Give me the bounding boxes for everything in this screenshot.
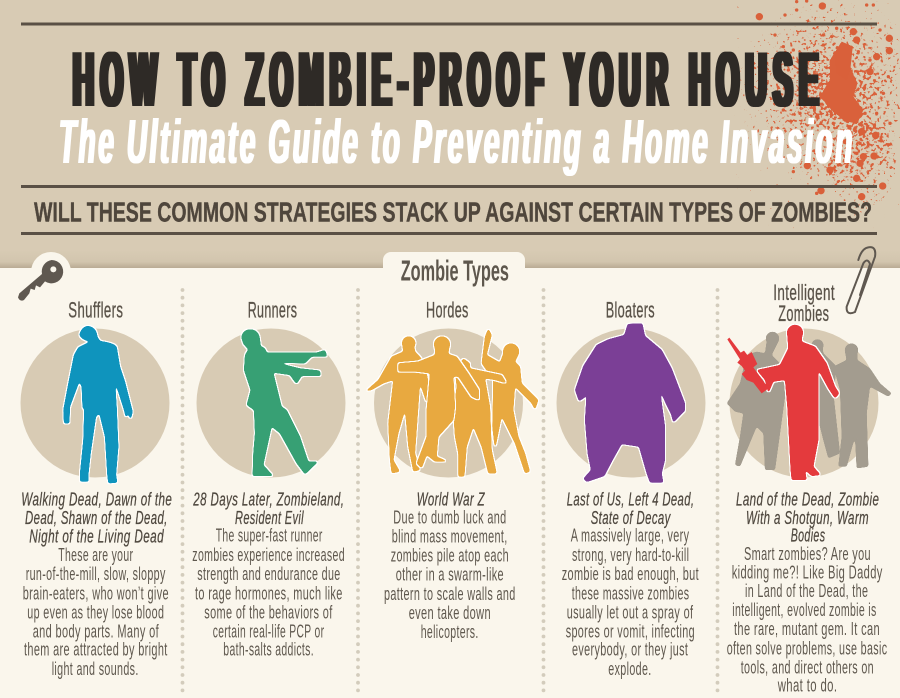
- heading: shufflers: Shufflers: [68, 297, 123, 322]
- text: hordes description: helicopters.: [421, 622, 479, 642]
- text: hordes description: zombies pile atop each: [391, 546, 509, 566]
- text: runners description: zombies experience increased: [192, 545, 345, 565]
- text: shufflers description: run-of-the-mill, slow, sloppy: [26, 564, 166, 584]
- text: shufflers description: Dead, Shawn of the Dead,: [25, 508, 168, 528]
- tab: zombie types: [383, 252, 525, 268]
- icon: key: [18, 260, 63, 301]
- text: bloaters description: these massive zombies: [572, 583, 689, 603]
- text: runners description: strength and endurance due: [197, 564, 341, 584]
- column dividers: [182, 290, 718, 698]
- text: runners description: bath-salts addicts.: [223, 640, 314, 660]
- text: intelligent description: [727, 490, 887, 696]
- text: bloaters description: strong, very hard-to-kill: [572, 545, 689, 565]
- text: runners description: Resident Evil: [235, 508, 304, 528]
- heading: hordes: Hordes: [426, 297, 469, 322]
- panel: hordes: [365, 297, 538, 642]
- text: hordes description: Due to dumb luck and: [393, 507, 507, 527]
- figure: horde of zombies: [365, 328, 538, 477]
- text: bloaters description: zombie is bad enough, but: [562, 564, 699, 584]
- text: shufflers description: light and sounds.: [52, 659, 139, 679]
- heading: intelligent zombies: Zombies: [778, 301, 829, 326]
- text: shufflers description: [21, 490, 172, 679]
- figure: runner zombie: [241, 329, 327, 476]
- header rule middle: [21, 185, 877, 188]
- panel: shufflers: [20, 297, 172, 679]
- text: intelligent description: Bodies: [791, 526, 825, 546]
- panel: runners: [192, 297, 346, 660]
- text: bloaters description: [562, 490, 699, 679]
- heading: intelligent zombies: [773, 280, 835, 326]
- text: runners description: some of the behaviors of: [204, 602, 333, 622]
- circle: shufflers backdrop: [20, 328, 170, 478]
- text: bloaters description: usually let out a spray of: [567, 602, 694, 622]
- text: runners description: The super-fast runner: [216, 526, 323, 546]
- text: bloaters description: everybody, or they just: [572, 640, 688, 660]
- icon: paper clip: [847, 247, 875, 313]
- circle: intelligent backdrop: [730, 328, 878, 478]
- heading: intelligent zombies: Intelligent: [773, 280, 835, 305]
- text: bloaters description: A massively large, very: [571, 526, 689, 546]
- heading: runners: Runners: [248, 297, 297, 322]
- text: bloaters description: spores or vomit, infecting: [566, 621, 695, 641]
- text: hordes description: pattern to scale walls and: [384, 584, 516, 604]
- text: runners description: 28 Days Later, Zombieland,: [193, 490, 344, 510]
- blood splatter: [730, 0, 900, 215]
- text: hordes description: blind mass movement,: [392, 526, 508, 546]
- text: runners description: certain real-life PCP or: [213, 621, 324, 641]
- text: hordes description: even take down: [409, 603, 491, 623]
- text: bloaters description: Last of Us, Left 4 Dead,: [567, 490, 694, 510]
- text: runners description: [192, 490, 345, 660]
- text: intelligent description: what to do.: [777, 676, 837, 696]
- text: hordes description: [384, 490, 516, 642]
- key tab: [31, 252, 71, 292]
- header rule top: [21, 22, 877, 26]
- text: runners description: to rage hormones, much like: [195, 583, 343, 603]
- text: shufflers description: and body parts. Many of: [33, 621, 159, 641]
- text: shufflers description: them are attracted by bright: [24, 640, 168, 660]
- figure: shuffler zombie: [63, 326, 133, 483]
- circle: hordes backdrop: [374, 328, 523, 478]
- header rule bottom: [21, 232, 877, 235]
- text: shufflers description: These are your: [58, 545, 133, 565]
- panel: bloaters: [556, 297, 706, 679]
- text: bloaters description: explode.: [608, 659, 652, 679]
- text: hordes description: other in a swarm-like: [396, 565, 504, 585]
- heading: bloaters: Bloaters: [606, 297, 655, 322]
- text: shufflers description: Night of the Living Dead: [29, 526, 164, 546]
- text: hordes description: World War Z: [417, 490, 485, 510]
- figure: intelligent zombie with rifle and grey zombies: [727, 325, 892, 480]
- panel: intelligent zombies: [727, 280, 892, 696]
- text: bloaters description: State of Decay: [591, 508, 671, 528]
- figure: bloater zombie: [575, 323, 685, 483]
- heading: zombie types: Zombie Types: [401, 256, 509, 288]
- circle: runners backdrop: [196, 328, 346, 478]
- circle: bloaters backdrop: [556, 328, 706, 478]
- text: shufflers description: up even as they lose blood: [27, 602, 164, 622]
- text: shufflers description: Walking Dead, Dawn of the: [21, 490, 172, 510]
- text: shufflers description: brain-eaters, who won’t give: [23, 583, 169, 603]
